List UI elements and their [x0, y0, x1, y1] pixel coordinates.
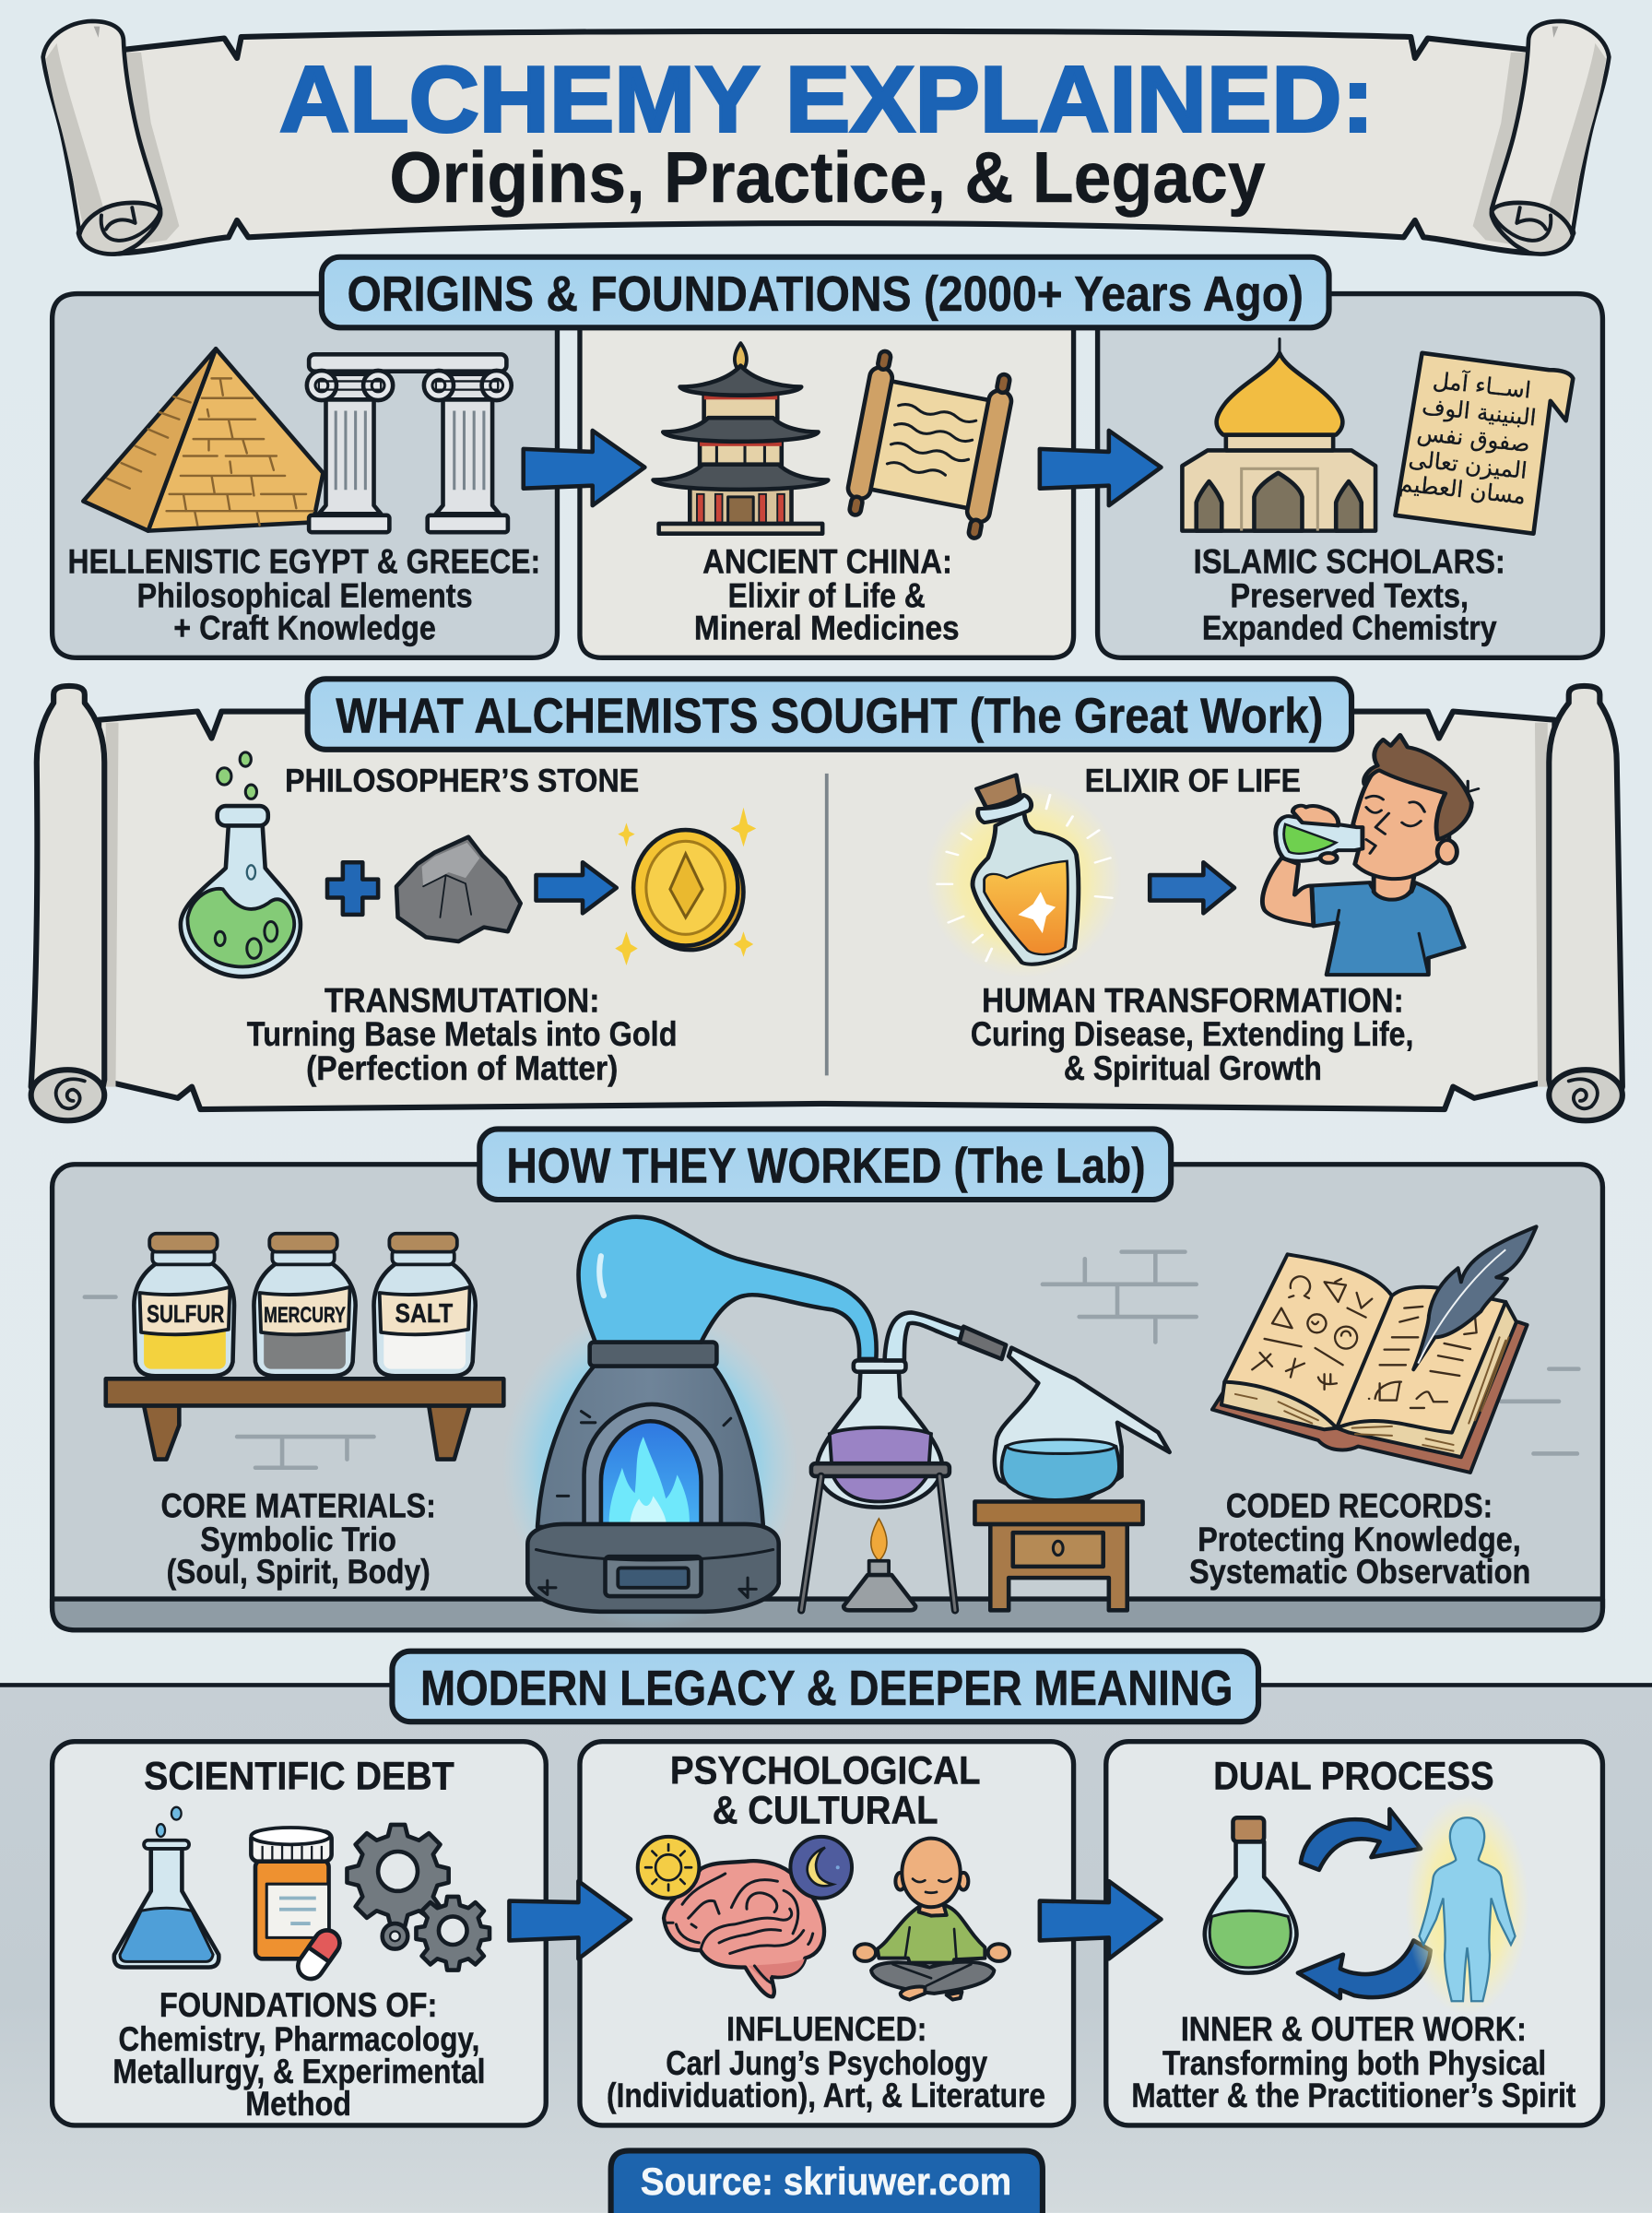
icon: gears: [347, 1825, 490, 1970]
arrow: elixir to person: [1150, 862, 1234, 913]
text: human transformation: [971, 981, 1413, 1087]
icon: arabic manuscript: صفوق نفس: [1416, 419, 1531, 457]
heading: psychological and cultural: PSYCHOLOGICAL: [670, 1749, 981, 1793]
left scroll spiral: [31, 1070, 104, 1120]
heading: psychological and cultural: & CULTURAL: [713, 1788, 938, 1832]
text: inner and outer work: [1131, 2010, 1575, 2114]
icon: sulfur jar: [134, 1234, 234, 1376]
text: coded records: Systematic Observation: [1189, 1553, 1530, 1591]
icon: clamp on tube: [960, 1327, 1006, 1359]
icon: salt jar: SALT: [395, 1299, 453, 1329]
wall bricks: [85, 1252, 1578, 1468]
icon: plus sign: [327, 862, 378, 915]
arrow: curved matter to spirit: [1301, 1809, 1421, 1870]
text: foundations of: Method: [245, 2085, 351, 2123]
right scroll roll: [1492, 21, 1609, 254]
heading: how they worked: HOW THEY WORKED (The Lab): [506, 1140, 1146, 1194]
icon: arabic manuscript: [1395, 353, 1573, 534]
band background: [0, 1685, 1652, 2213]
card: psychological and cultural: [580, 1742, 1074, 2125]
icon: wooden side table: [974, 1501, 1143, 1610]
text: influenced: (Individuation), Art, & Literature: [607, 2077, 1045, 2114]
text: inner and outer work: Transforming both Physical: [1162, 2044, 1546, 2082]
label: Elixir of Life: ELIXIR OF LIFE: [1085, 763, 1301, 799]
text: foundations of: FOUNDATIONS OF:: [159, 1986, 437, 2024]
scroll right shading: [1473, 53, 1529, 247]
icon: heating flask on stand: [801, 1360, 955, 1610]
text: human transformation: & Spiritual Growth: [1064, 1049, 1322, 1087]
text: core materials: [160, 1486, 436, 1591]
icon: moon emblem: [790, 1837, 852, 1899]
text: human transformation: HUMAN TRANSFORMATION:: [982, 981, 1404, 1019]
icon: open codex with quill: [1212, 1226, 1537, 1473]
text: core materials: (Soul, Spirit, Body): [167, 1553, 431, 1591]
icon: glowing human figure: [1405, 1795, 1529, 2016]
heading: scientific debt: SCIENTIFIC DEBT: [144, 1755, 454, 1799]
icon: domed mosque: [1182, 339, 1375, 531]
text: Islamic Scholars: Expanded Chemistry: [1202, 609, 1497, 646]
icon: green potion bottle: [1205, 1817, 1296, 1973]
text: Islamic Scholars: Preserved Texts,: [1230, 576, 1469, 614]
icon: ancient scroll: [844, 349, 1016, 540]
heading: modern legacy: MODERN LEGACY & DEEPER MEANING: [420, 1662, 1233, 1716]
text: human transformation: Curing Disease, Extending Life,: [971, 1015, 1413, 1053]
icon: spirit burner: [844, 1519, 915, 1610]
text: core materials: Symbolic Trio: [200, 1521, 396, 1558]
scroll body: [99, 712, 1554, 1109]
text: Hellenistic Egypt and Greece: + Craft Knowledge: [173, 609, 436, 646]
icon: mercury jar: [254, 1234, 356, 1376]
lab floor: [53, 1599, 1602, 1630]
icon: green bubbling flask: [181, 752, 301, 976]
scroll left shading: [123, 53, 179, 247]
right scroll roll: [1549, 686, 1622, 1118]
text: foundations of: Chemistry, Pharmacology,: [119, 2020, 479, 2058]
icon: retort glass vessel: [579, 1217, 877, 1359]
icon: greek columns: [307, 354, 512, 532]
icon: arabic manuscript: الميزن تعالى: [1408, 445, 1528, 484]
icon: sun emblem: [638, 1837, 699, 1899]
footer: source tag: Source: skriuwer.com: [641, 2160, 1011, 2203]
icon: pagoda: [654, 343, 828, 534]
text: Hellenistic Egypt and Greece: HELLENISTIC EGYPT & GREECE:: [67, 543, 540, 581]
icon: medicine bottle and capsule: [251, 1828, 345, 1983]
left scroll roll: [43, 21, 160, 254]
text: foundations of: [112, 1986, 485, 2123]
text: core materials: CORE MATERIALS:: [160, 1486, 436, 1524]
icon: glowing elixir bottle: [926, 775, 1122, 977]
icon: sulfur jar: SULFUR: [147, 1300, 224, 1328]
right scroll spiral: [1549, 1070, 1622, 1120]
heading: how they worked: [479, 1129, 1171, 1200]
arrow: curved spirit to matter: [1298, 1940, 1431, 1998]
text: Hellenistic Egypt and Greece: [67, 543, 540, 646]
footer: source tag: [611, 2150, 1043, 2213]
icon: mercury jar: MERCURY: [264, 1303, 346, 1328]
icon: base metal rock: [396, 837, 521, 941]
divider between goals: [826, 774, 828, 1075]
heading: origins and foundations: ORIGINS & FOUNDATIONS (2000+ Years Ago): [347, 267, 1304, 322]
heading: what alchemists sought: [308, 679, 1351, 750]
text: Hellenistic Egypt and Greece: Philosophical Elements: [136, 576, 473, 614]
text: transmutation: Turning Base Metals into Gold: [247, 1015, 678, 1053]
icon: erlenmeyer flask: [114, 1807, 218, 1967]
card: dual process: [1106, 1742, 1602, 2125]
panel: modern legacy band: [0, 1685, 1652, 2213]
icon: blue glow behind furnace: [502, 1306, 798, 1630]
icon: shelf: [106, 1379, 503, 1460]
title line 1: ALCHEMY EXPLAINED:: [279, 49, 1375, 152]
title line 2: Origins, Practice, & Legacy: [389, 136, 1266, 218]
left scroll roll: [31, 686, 104, 1118]
text: Islamic Scholars: [1194, 543, 1505, 646]
text: transmutation: (Perfection of Matter): [306, 1049, 618, 1087]
text: Ancient China: ANCIENT CHINA:: [702, 543, 952, 581]
arrow: psychology to dual process: [1040, 1881, 1161, 1959]
lab wall: [53, 1165, 1602, 1630]
arrow: Egypt to China: [524, 431, 644, 505]
text: influenced: Carl Jung’s Psychology: [666, 2044, 988, 2082]
arrow: rock to gold: [537, 862, 617, 913]
text: influenced: [607, 2010, 1045, 2114]
origins card: Ancient China: [580, 318, 1074, 657]
icon: furnace with blue flame: [527, 1343, 779, 1612]
band top rule: [0, 1684, 1652, 1686]
icon: arabic manuscript: البنينية الوف: [1421, 393, 1538, 432]
text: Ancient China: [694, 543, 960, 646]
text: inner and outer work: INNER & OUTER WORK:: [1181, 2010, 1527, 2048]
panel: origins and foundations: [53, 294, 1602, 657]
icon: arabic manuscript: مسان العطيم: [1398, 469, 1527, 509]
heading: what alchemists sought: WHAT ALCHEMISTS SOUGHT (The Great Work): [336, 689, 1323, 743]
card: scientific debt: [53, 1742, 546, 2125]
text: transmutation: [247, 981, 678, 1087]
panel: what alchemists sought scroll: [31, 686, 1622, 1120]
icon: gold coin with sparkles: [615, 808, 756, 965]
text: coded records: [1189, 1486, 1530, 1591]
text: coded records: CODED RECORDS:: [1226, 1486, 1493, 1524]
origins card: Hellenistic Egypt and Greece: [53, 294, 557, 657]
text: coded records: Protecting Knowledge,: [1198, 1521, 1521, 1558]
scroll shading: [106, 723, 1548, 1087]
scroll body: [79, 31, 1573, 254]
icon: condenser tube: [885, 1312, 965, 1360]
text: Ancient China: Mineral Medicines: [694, 609, 960, 646]
text: influenced: INFLUENCED:: [726, 2010, 926, 2048]
label: Philosopher's Stone: PHILOSOPHER’S STONE: [285, 763, 639, 799]
icon: receiving flask: [995, 1348, 1170, 1500]
panel: how they worked lab: [53, 1165, 1602, 1630]
text: inner and outer work: Matter & the Practitioner’s Spirit: [1131, 2077, 1575, 2114]
panel: title banner scroll: [43, 21, 1609, 254]
text: Ancient China: Elixir of Life &: [728, 576, 926, 614]
text: Islamic Scholars: ISLAMIC SCHOLARS:: [1194, 543, 1505, 581]
arrow: science to psychology: [509, 1881, 631, 1959]
text: foundations of: Metallurgy, & Experimental: [112, 2053, 485, 2090]
icon: arabic manuscript: اســاء آمل: [1432, 367, 1532, 404]
icon: brain: [664, 1861, 824, 1996]
heading: dual process: DUAL PROCESS: [1213, 1755, 1494, 1799]
icon: man drinking elixir: [1262, 735, 1479, 975]
heading: psychological and cultural: [670, 1749, 981, 1832]
icon: salt jar: [374, 1234, 476, 1376]
heading: modern legacy: [392, 1651, 1258, 1722]
icon: meditating person: [855, 1839, 1009, 2000]
arrow: China to Islamic scholars: [1040, 431, 1161, 505]
text: transmutation: TRANSMUTATION:: [324, 981, 599, 1019]
origins card: Islamic Scholars: [1098, 294, 1602, 657]
icon: pyramid: [83, 349, 323, 531]
